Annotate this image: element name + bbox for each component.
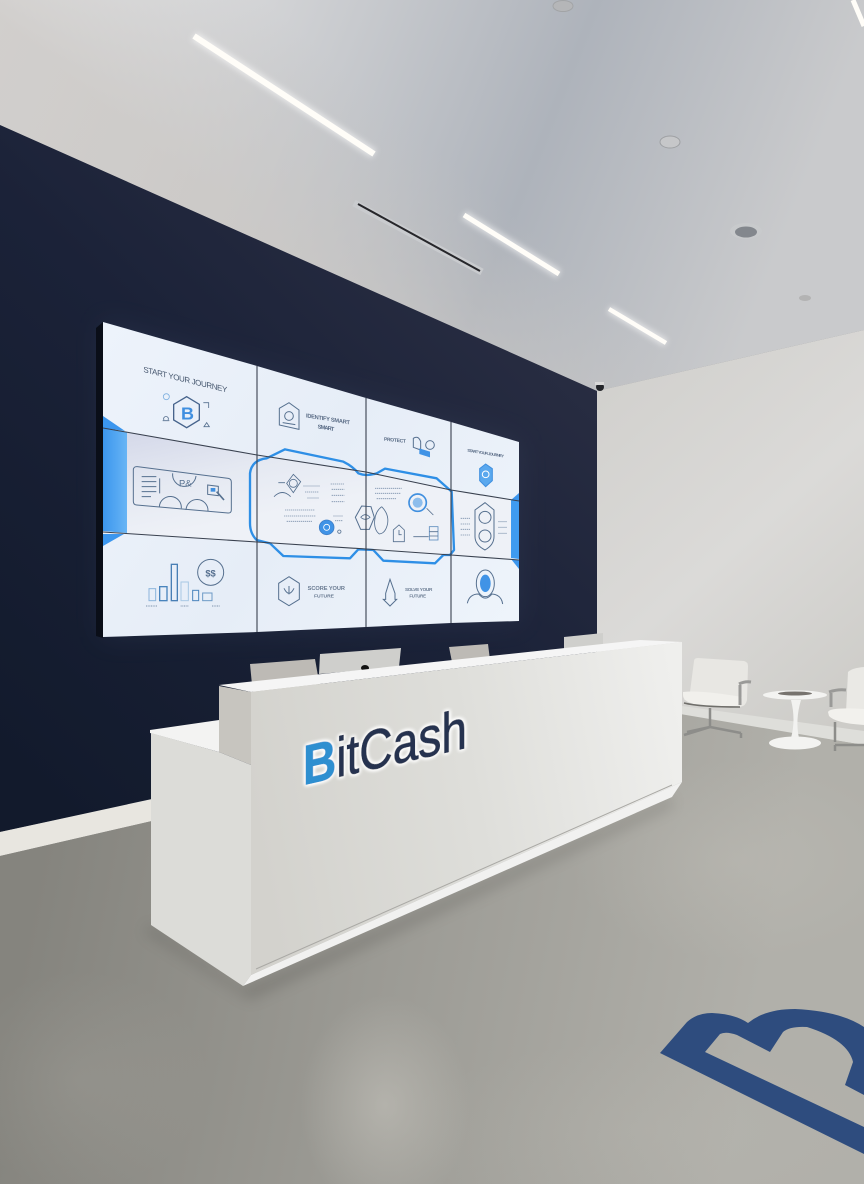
floor light reflection right bbox=[570, 760, 864, 960]
icon: house bbox=[279, 403, 299, 429]
icon: blue node bbox=[319, 520, 341, 535]
apple-style mark bbox=[361, 665, 369, 671]
heading: identify smart: IDENTIFY SMART bbox=[306, 413, 351, 426]
air vent bbox=[354, 203, 482, 272]
ceiling light strip 2 bbox=[464, 215, 559, 274]
bar chart bbox=[146, 559, 224, 606]
downlight bbox=[730, 223, 762, 239]
heading: identify smart bbox=[306, 413, 351, 433]
icon: B hexagon: B bbox=[181, 403, 194, 423]
right blue triangle bottom bbox=[511, 559, 519, 569]
floor bbox=[0, 700, 864, 1184]
right wall baseboard bbox=[660, 703, 864, 745]
heading: score your future: SCORE YOUR bbox=[308, 586, 345, 592]
heading: score your future: FUTURE bbox=[314, 593, 335, 599]
video wall bbox=[96, 322, 519, 638]
icon: bubble bbox=[375, 507, 388, 534]
smoke detector bbox=[660, 136, 680, 148]
icon: down arrow bbox=[383, 579, 397, 606]
icons around hexagon bbox=[163, 394, 209, 427]
arm bbox=[739, 682, 751, 705]
left wall baseboard bbox=[0, 799, 152, 856]
ceiling light strip 3 bbox=[609, 309, 666, 343]
left blue triangle bottom bbox=[103, 534, 124, 546]
ceiling light strip 1 bbox=[194, 36, 374, 154]
back bbox=[684, 658, 748, 707]
icon: B hexagon bbox=[174, 397, 199, 428]
left blue band bbox=[103, 428, 127, 533]
heading: solve your future: FUTURE bbox=[409, 594, 426, 599]
small ceiling sensor bbox=[799, 295, 811, 301]
floor light reflection lower bbox=[400, 1040, 864, 1184]
icon: large shield bbox=[475, 503, 494, 550]
icon: blue shield bbox=[480, 464, 492, 487]
security camera bbox=[595, 382, 604, 391]
heading: score your future bbox=[308, 586, 345, 599]
desk upper side bbox=[219, 686, 251, 765]
icon: tools bbox=[413, 437, 434, 457]
staff chair left bbox=[250, 659, 319, 695]
ceiling bbox=[0, 0, 864, 391]
magazine bbox=[778, 692, 812, 696]
seat bbox=[683, 692, 742, 706]
lounge chair left bbox=[683, 658, 751, 738]
lounge chair right bbox=[828, 667, 864, 751]
right wall bbox=[597, 330, 864, 745]
desk floor shadow bbox=[145, 798, 672, 1000]
desk lower side bbox=[151, 733, 251, 986]
dashboard panel bbox=[133, 467, 231, 513]
right blue triangle top bbox=[511, 493, 519, 501]
text lines bbox=[284, 484, 507, 535]
seat underside bbox=[684, 703, 740, 707]
reception desk bbox=[150, 640, 682, 986]
floor light reflection left bbox=[0, 970, 210, 1184]
blue outline callout bbox=[250, 449, 454, 563]
monitor left bbox=[319, 648, 401, 674]
icon: score hexagon bbox=[279, 577, 299, 606]
icon: blue ring bbox=[409, 494, 433, 515]
heading: start your journey: START YOUR JOURNEY bbox=[143, 365, 228, 395]
side table bbox=[763, 690, 827, 750]
heading: solve your future bbox=[405, 587, 433, 599]
left blue triangle top bbox=[103, 416, 125, 431]
floor light reflection centre bbox=[300, 995, 470, 1184]
navy feature wall bbox=[0, 125, 597, 832]
icon: node circle bbox=[274, 474, 301, 497]
icon: blue target with hands bbox=[467, 570, 503, 604]
icon: clock tag bbox=[393, 525, 404, 542]
heading: identify smart: SMART bbox=[318, 424, 335, 433]
desk plinth bbox=[243, 782, 682, 986]
right blue band bbox=[511, 500, 519, 559]
ceiling light strip corner bbox=[853, 0, 864, 26]
heading: protect: PROTECT bbox=[384, 437, 406, 445]
logo: BitCash: BitCash bbox=[303, 698, 467, 798]
icon: stacked boxes bbox=[413, 527, 438, 540]
heading: small start your journey: START YOUR JOURNEY bbox=[467, 448, 504, 459]
bar chart: $$ bbox=[205, 569, 217, 579]
screen glow on wall bbox=[103, 322, 519, 637]
screen contents bbox=[133, 365, 507, 606]
screen frame shadow bbox=[96, 322, 103, 638]
centre flow diagram bbox=[274, 474, 507, 542]
plinth shadow line bbox=[256, 785, 672, 969]
desk shelf top bbox=[150, 720, 219, 752]
staff chair right bbox=[449, 644, 490, 662]
desk front face bbox=[251, 642, 682, 975]
screen panel background bbox=[103, 322, 519, 637]
floor logo bbox=[660, 1009, 864, 1154]
desk top surface bbox=[219, 640, 682, 692]
ceiling sensor bbox=[553, 0, 573, 12]
icon: centre hexagon bbox=[355, 506, 374, 529]
dashboard panel: P& bbox=[179, 479, 192, 489]
screen middle row bbox=[103, 428, 519, 560]
monitor right bbox=[564, 633, 603, 651]
screen grid lines bbox=[103, 366, 519, 632]
heading: solve your future: SOLVE YOUR bbox=[405, 587, 433, 592]
legs bbox=[684, 708, 741, 738]
